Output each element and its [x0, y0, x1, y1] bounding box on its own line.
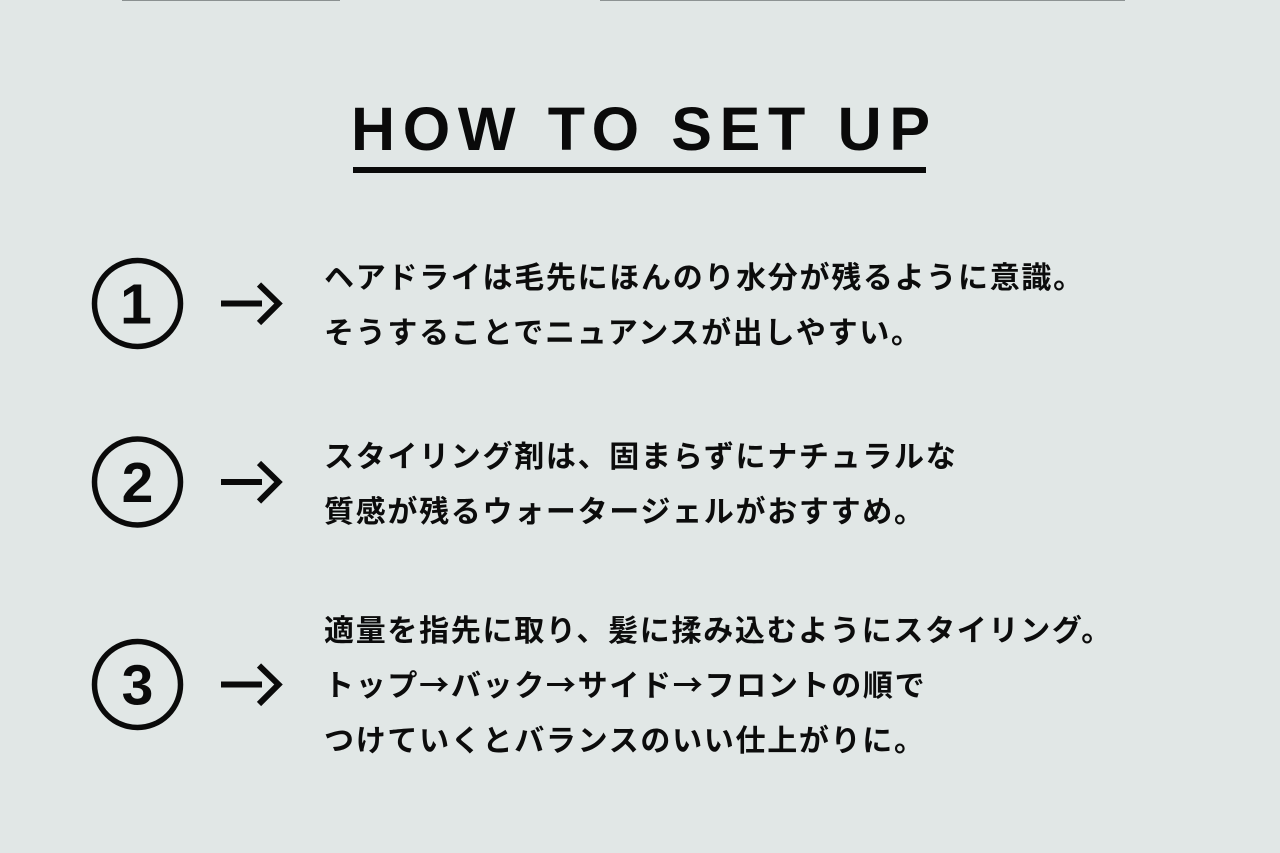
icon: number 3 in circle: 3 [122, 654, 153, 718]
icon: number 2 in circle [94, 439, 180, 525]
step 3 text: トップ→バック→サイド→フロントの順で [324, 661, 926, 705]
icon: number 2 in circle: 2 [122, 451, 153, 515]
step 2 text: 質感が残るウォータージェルがおすすめ。 [324, 495, 926, 529]
arrow 2 [221, 463, 278, 502]
icon: number 1 in circle [94, 260, 180, 346]
step 2 text [324, 441, 957, 529]
step 3 text: 適量を指先に取り、髪に揉み込むようにスタイリング。 [324, 615, 1113, 648]
step 3 [94, 615, 1113, 758]
step 1 text [324, 261, 1085, 350]
title: HOW TO SET UP [351, 95, 930, 163]
arrow 1 [221, 284, 278, 323]
step 1 [94, 260, 1085, 350]
step 3 text: つけていくとバランスのいい仕上がりに。 [324, 724, 926, 758]
step 2 [94, 439, 957, 529]
step 2 text: スタイリング剤は、固まらずにナチュラルな [324, 441, 957, 474]
step 1 text: そうすることでニュアンスが出しやすい。 [324, 316, 923, 350]
step 3 text [324, 615, 1113, 758]
step 1 text: ヘアドライは毛先にほんのり水分が残るように意識。 [324, 261, 1085, 295]
icon: number 1 in circle: 1 [120, 272, 152, 336]
top edge strip [122, 0, 1125, 1]
arrow 3 [221, 666, 278, 704]
icon: number 3 in circle [94, 642, 180, 728]
